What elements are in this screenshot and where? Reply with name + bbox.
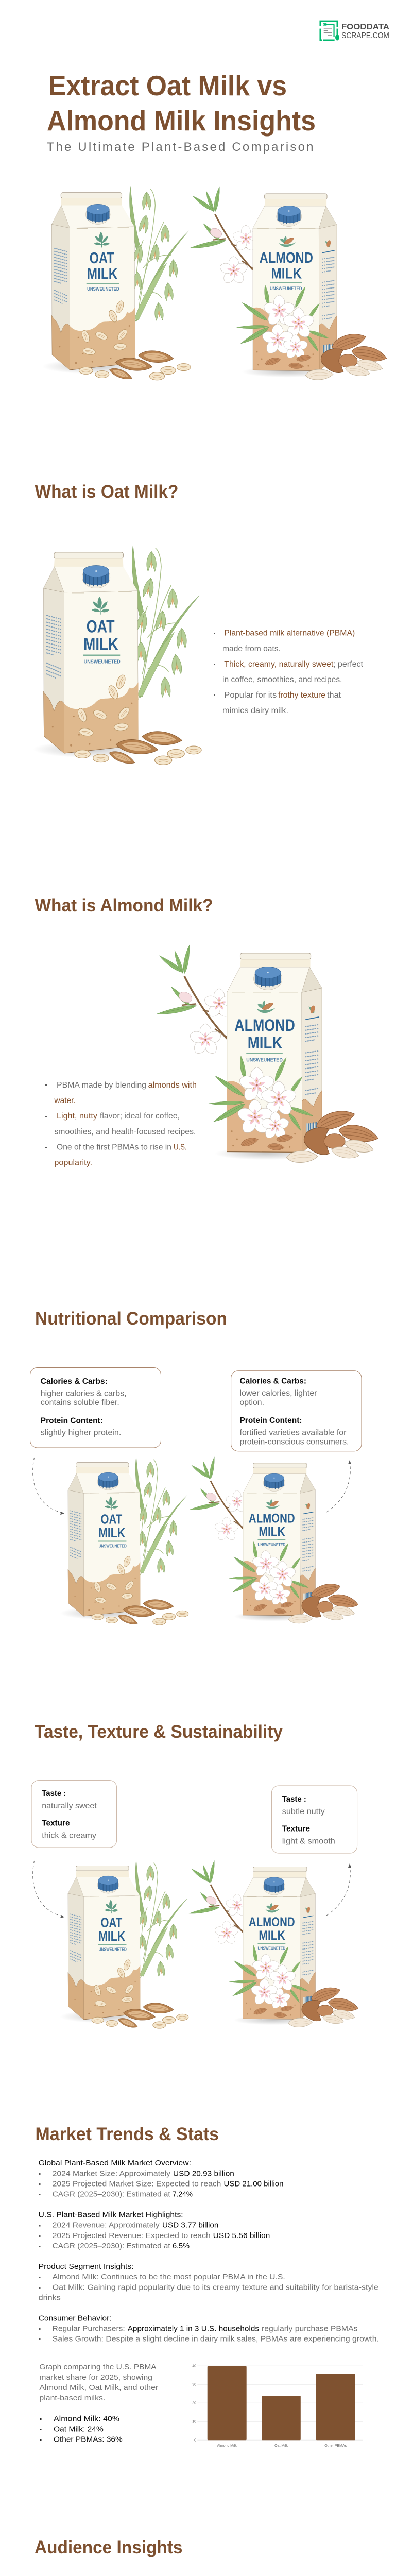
illustration: oat milk carton (nutrition): MILK [98,1525,125,1540]
arrow: almond carton to callout [326,1460,351,1512]
text block: oat milk bullets: mimics dairy milk. [222,706,288,715]
callout: oat milk taste and texture: Taste : [42,1789,66,1798]
bar chart: US PBMA market share: 20 [192,2402,196,2405]
text block: oat milk bullets: Popular for its [224,691,277,700]
bar chart: US PBMA market share: Almond Milk [217,2444,237,2448]
callout: oat milk taste and texture: thick & creamy [42,1831,96,1840]
illustration: oat milk carton (taste): OAT [101,1915,122,1930]
text block: global market overview: 2025 Projected Market Size: Expected to reach [53,2180,221,2189]
callout: oat milk nutrition: Protein Content: [41,1417,103,1426]
hero illustration: oat milk carton: UNSWEUNETED [87,286,119,292]
text block: almond milk bullets [45,1081,197,1167]
text block: product segment insights: Oat Milk: Gaining rapid popularity due to its creamy texture and suitability for barista-style [53,2283,378,2292]
callout: almond milk nutrition: lower calories, lighter [240,1389,317,1398]
illustration: almond milk carton (nutrition) [189,1456,359,1623]
illustration: almond milk carton (nutrition): ALMOND [249,1511,295,1526]
text block: oat milk bullets: Thick, creamy, naturally sweet [224,660,334,669]
callout: almond milk nutrition: option. [240,1398,264,1407]
illustration: oat milk carton (taste) [60,1860,188,2030]
text block: global market overview: USD 21.00 billion [223,2180,283,2189]
text block: graph description: plant-based milks. [39,2394,105,2402]
text block: US market highlights [39,2210,270,2250]
text block: consumer behavior: Consumer Behavior: [39,2314,112,2323]
illustration: almond milk carton (nutrition): UNSWEUNETED [257,1543,286,1547]
text block: graph description: Oat Milk: 24% [54,2425,104,2433]
illustration: almond milk carton with blossoms: UNSWEUNETED [246,1058,283,1063]
text block: graph description: Graph comparing the U.S. PBMA [39,2363,157,2371]
callout: almond milk nutrition: Calories & Carbs: [240,1377,306,1386]
bar chart: US PBMA market share: 10 [192,2420,196,2424]
text block: almond milk bullets: popularity. [54,1159,92,1167]
callout: oat milk taste and texture [31,1781,117,1848]
panel: nutritional comparison [30,1309,362,1625]
illustration: almond milk carton with blossoms [156,945,380,1163]
bar chart: US PBMA market share: 30 [192,2383,196,2386]
heading: what is almond milk: What is Almond Milk? [35,895,213,916]
callout: oat milk nutrition: higher calories & carbs, [41,1389,127,1398]
text block: graph description: Almond Milk: 40% [54,2414,119,2423]
text block: almond milk bullets: Light, nutty [57,1112,97,1121]
hero illustration: oat milk carton [42,187,191,382]
logo: top right: SCRAPE.COM [341,31,389,40]
text block: oat milk bullets: made from oats. [222,645,281,653]
text block: consumer behavior: Sales Growth: Despite a slight decline in dairy milk sales, PBMAs are experiencing growth. [53,2334,379,2343]
bar chart: US PBMA market share: Oat Milk [274,2444,288,2448]
illustration: oat milk carton with oat plant [33,545,201,767]
text block: global market overview [39,2159,283,2199]
logo: top right: FOODDATA [341,23,389,31]
heading: market trends and stats: Market Trends & Stats [35,2124,219,2144]
text block: oat milk bullets: that [327,691,341,700]
bar chart: US PBMA market share: Other PBMAs [324,2444,347,2448]
illustration: almond milk carton (nutrition): MILK [259,1524,285,1539]
text block: graph description: Other PBMAs: 36% [54,2435,123,2444]
callout: almond milk taste and texture: light & smooth [282,1837,335,1846]
arrow: oat callout to carton [33,1458,64,1515]
text block: almond milk bullets: flavor; ideal for coffee, [100,1112,180,1121]
text block: oat milk bullets: frothy texture [278,691,325,700]
heading: taste, texture and sustainability: Taste, Texture & Sustainability [35,1722,283,1742]
bar chart: US PBMA market share [192,2365,363,2448]
arrow: oat taste callout to carton [33,1861,64,1918]
text block: global market overview: Global Plant-Based Milk Market Overview: [39,2159,191,2167]
text block: graph description: Almond Milk, Oat Milk, and other [39,2383,158,2392]
callout: almond milk taste and texture [271,1786,357,1853]
text block: global market overview: CAGR (2025–2030): Estimated at [53,2190,171,2199]
text block: oat milk bullets: in coffee, smoothies, and recipes. [222,675,342,684]
text block: global market overview: 7.24% [173,2190,193,2199]
text block: US market highlights: 2024 Revenue: Approximately [53,2221,160,2230]
illustration: almond milk carton (taste): MILK [259,1928,285,1943]
logo: top right [319,21,389,41]
callout: oat milk taste and texture: naturally sweet [42,1802,97,1810]
illustration: almond milk carton with blossoms: ALMOND [234,1015,295,1035]
illustration: oat milk carton with oat plant: OAT [87,617,115,636]
text block: global market overview: 2024 Market Size: Approximately [53,2169,171,2178]
text block: product segment insights: Almond Milk: Continues to be the most popular PBMA in the U.S. [53,2273,285,2281]
callout: almond milk nutrition [231,1371,362,1451]
callout: oat milk nutrition: slightly higher protein. [41,1429,121,1437]
text block: graph description [39,2363,158,2444]
text block: consumer behavior [39,2314,379,2343]
illustration: almond milk carton (taste) [189,1860,359,2027]
illustration: oat milk carton (nutrition) [60,1457,188,1626]
bar chart: US PBMA market share: 40 [192,2365,196,2368]
panel: market trends and stats [35,2124,379,2448]
callout: almond milk nutrition: fortified varieties available for [240,1429,347,1437]
callout: almond milk taste and texture: subtle nutty [282,1807,325,1816]
text block: US market highlights: USD 3.77 billion [162,2221,218,2230]
text block: product segment insights [39,2262,378,2302]
text block: consumer behavior: Regular Purchasers: [53,2324,125,2333]
hero illustration: almond milk carton: ALMOND [260,250,313,266]
subtitle: The Ultimate Plant-Based Comparison [46,140,313,154]
panel: taste, texture and sustainability [31,1722,358,2029]
callout: almond milk nutrition: protein-conscious consumers. [240,1437,349,1446]
bar: oat milk [262,2396,301,2440]
arrow: almond carton to taste callout [326,1863,351,1916]
hero illustration: almond milk carton: UNSWEUNETED [270,286,302,291]
hero illustration: almond milk carton [190,186,388,380]
illustration: oat milk carton with oat plant: UNSWEUNETED [84,659,121,665]
panel: what is almond milk [35,895,378,1167]
text block: oat milk bullets: ; perfect [333,660,364,669]
illustration: oat milk carton (nutrition): UNSWEUNETED [99,1544,127,1549]
hero illustration: almond milk carton: MILK [271,265,302,282]
text block: oat milk bullets [214,629,364,715]
text block: almond milk bullets: U.S. [174,1143,187,1152]
text block: product segment insights: drinks [39,2293,61,2302]
callout: oat milk nutrition: Calories & Carbs: [41,1377,108,1386]
heading: audience insights: Audience Insights [35,2537,182,2557]
text block: almond milk bullets: One of the first PBMAs to rise in [57,1143,171,1152]
text block: oat milk bullets: Plant-based milk alternative (PBMA) [224,629,355,638]
text block: almond milk bullets: PBMA made by blending [57,1081,146,1090]
illustration: almond milk carton (taste): UNSWEUNETED [257,1946,286,1951]
illustration: oat milk carton (nutrition): OAT [101,1512,122,1527]
callout: oat milk taste and texture: Texture [42,1819,70,1827]
bar: other PBMAs [316,2374,355,2440]
hero illustration: oat milk carton: OAT [90,250,114,267]
callout: almond milk nutrition: Protein Content: [240,1416,302,1425]
callout: oat milk nutrition [30,1367,161,1448]
text block: almond milk bullets: water. [54,1096,76,1105]
callout: almond milk taste and texture: Texture [282,1825,310,1834]
callout: oat milk nutrition: contains soluble fiber. [41,1398,119,1407]
text block: US market highlights: 6.5% [173,2242,190,2250]
text block: consumer behavior: Approximately 1 in 3 U.S. households [128,2324,259,2333]
panel: what is oat milk [35,482,364,765]
text block: global market overview: USD 20.93 billion [173,2169,234,2178]
text block: US market highlights: 2025 Projected Revenue: Expected to reach [53,2231,211,2240]
illustration: almond milk carton with blossoms: MILK [248,1033,283,1052]
text block: consumer behavior: regularly purchase PBMAs [262,2324,357,2333]
text block: US market highlights: CAGR (2025–2030): Estimated at [53,2242,171,2250]
callout: almond milk taste and texture: Taste : [282,1795,306,1804]
hero illustration: oat milk carton: MILK [87,266,118,283]
text block: US market highlights: U.S. Plant-Based Milk Market Highlights: [39,2210,183,2219]
bar: almond milk [208,2366,247,2440]
illustration: oat milk carton (taste): MILK [98,1928,125,1944]
heading: nutritional comparison: Nutritional Comparison [35,1309,227,1329]
illustration: almond milk carton (taste): ALMOND [249,1915,295,1929]
illustration: oat milk carton (taste): UNSWEUNETED [99,1947,127,1952]
text block: almond milk bullets: smoothies, and health-focused recipes. [54,1127,196,1137]
title: Almond Milk Insights [47,105,316,137]
text block: US market highlights: USD 5.56 billion [213,2231,270,2240]
illustration: oat milk carton with oat plant: MILK [83,635,118,654]
heading: what is oat milk: What is Oat Milk? [35,482,178,502]
text block: product segment insights: Product Segment Insights: [39,2262,134,2271]
bar chart: US PBMA market share: 0 [194,2439,196,2442]
title [47,70,316,137]
text block: graph description: market share for 2025, showing [39,2373,152,2382]
title: Extract Oat Milk vs [48,70,287,101]
text block: almond milk bullets: almonds with [148,1081,197,1090]
panel: header and hero [46,21,389,380]
